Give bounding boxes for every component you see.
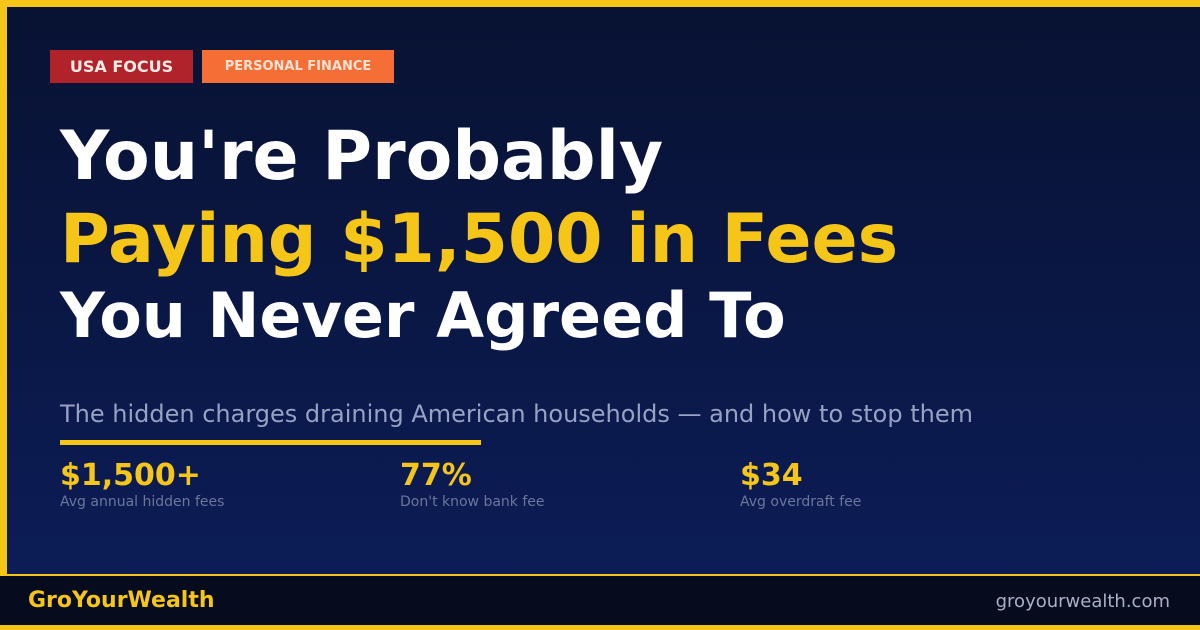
stat 3: $34 bbox=[740, 458, 803, 493]
stat 3: Avg overdraft fee bbox=[740, 494, 861, 510]
stat 1: $1,500+ bbox=[60, 458, 201, 493]
url: groyourwealth.com bbox=[996, 591, 1170, 612]
accent bar bbox=[60, 440, 481, 445]
stat 2 bbox=[400, 458, 545, 510]
stat 2: 77% bbox=[400, 458, 472, 493]
tag: USA FOCUS: USA FOCUS bbox=[70, 57, 173, 76]
title line 1: You're Probably bbox=[60, 117, 663, 196]
title line 2: Paying $1,500 in Fees bbox=[60, 200, 898, 279]
subtitle: The hidden charges draining American households — and how to stop them bbox=[60, 400, 973, 428]
tag: PERSONAL FINANCE bbox=[202, 50, 394, 83]
brand: GroYourWealth bbox=[28, 588, 215, 613]
stat 1 bbox=[60, 458, 224, 510]
stat 2: Don't know bank fee bbox=[400, 494, 545, 510]
tag: PERSONAL FINANCE: PERSONAL FINANCE bbox=[225, 59, 371, 74]
tag: USA FOCUS bbox=[50, 50, 193, 83]
footer bbox=[0, 576, 1200, 625]
stat 1: Avg annual hidden fees bbox=[60, 494, 224, 510]
title line 3: You Never Agreed To bbox=[60, 279, 786, 352]
stat 3 bbox=[740, 458, 861, 510]
